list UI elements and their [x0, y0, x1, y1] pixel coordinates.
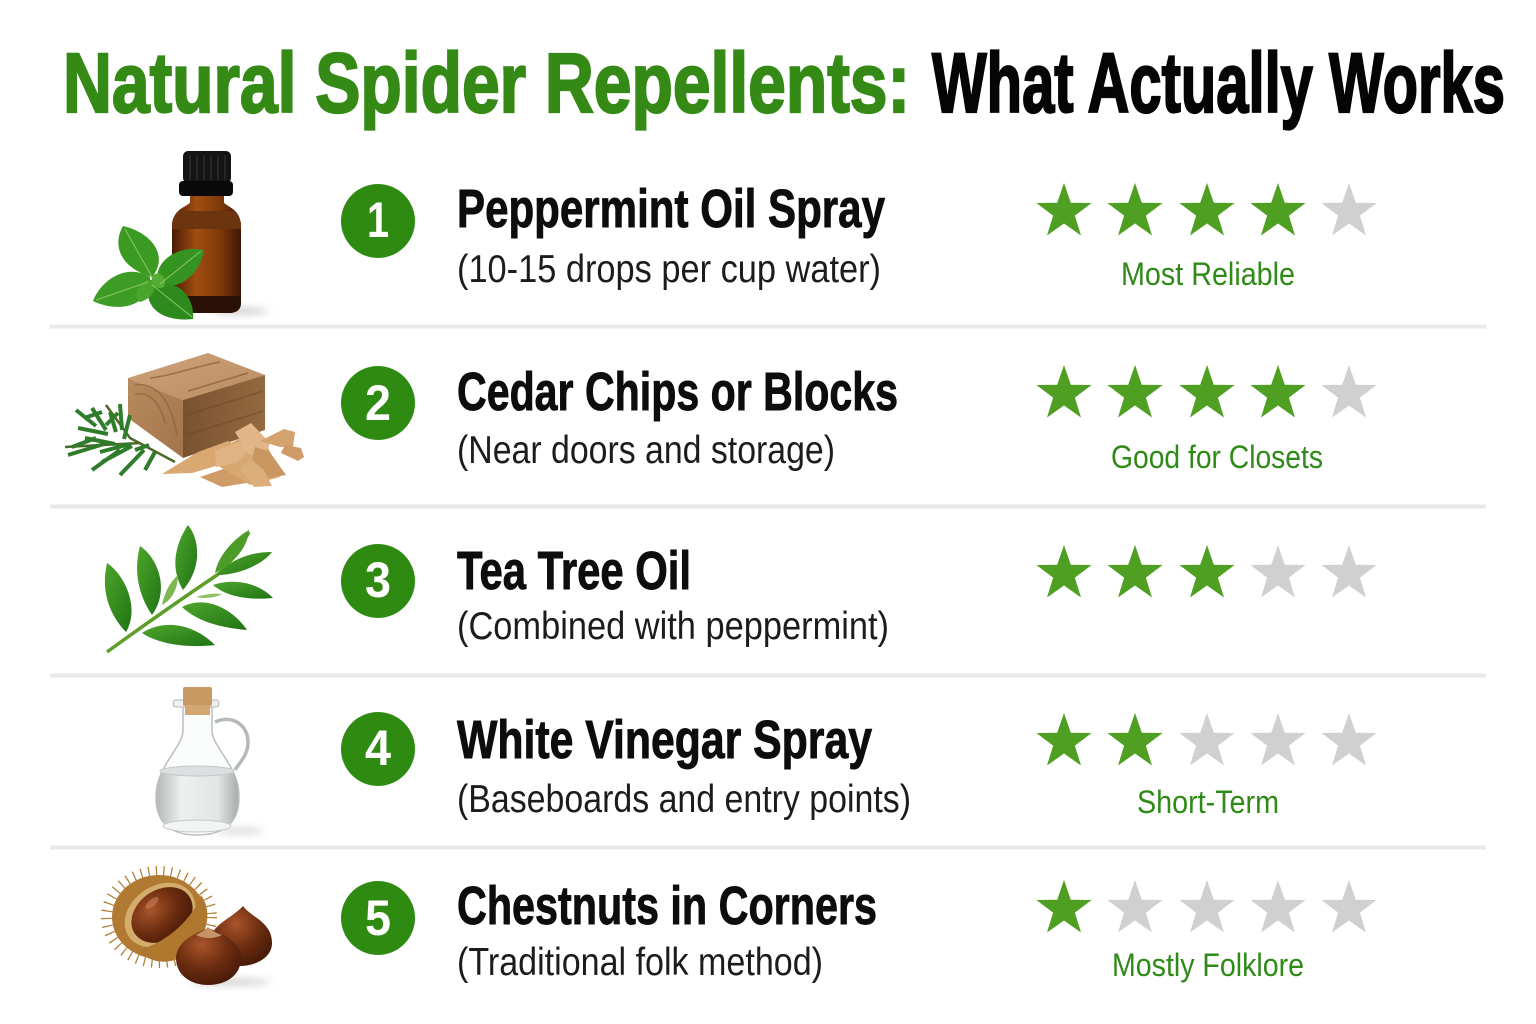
usage note: (Near doors and storage) — [457, 429, 835, 472]
heading: White Vinegar Spray — [457, 710, 872, 770]
heading: Peppermint Oil Spray — [457, 179, 885, 239]
usage note: (Baseboards and entry points) — [457, 778, 911, 821]
number badge 3 — [341, 544, 415, 618]
row 2: cedar chips or blocks — [65, 353, 1377, 487]
number badge 4 — [341, 712, 415, 786]
number badge 5 — [341, 881, 415, 955]
star rating: 2 of 5 — [1036, 713, 1377, 766]
rating label: Mostly Folklore — [1112, 947, 1304, 983]
icon: cedar block, chips and sprig — [65, 353, 304, 487]
heading: Cedar Chips or Blocks — [457, 362, 898, 422]
number badge 1 — [341, 184, 415, 258]
row 5: chestnuts in corners — [109, 869, 1377, 985]
icon: amber bottle with mint — [93, 151, 268, 319]
dosage note: (10-15 drops per cup water) — [457, 248, 881, 291]
icon: chestnuts and spiky husk — [109, 869, 272, 985]
row 1: peppermint oil spray — [93, 151, 1377, 319]
number badge 1: 1 — [367, 192, 389, 248]
icon: glass vinegar cruet — [156, 687, 264, 835]
star rating: 4 of 5 — [1036, 365, 1377, 418]
number badge 5: 5 — [365, 890, 391, 946]
row 3: tea tree oil — [105, 525, 1377, 652]
usage note: (Traditional folk method) — [457, 941, 823, 984]
number badge 3: 3 — [365, 552, 391, 608]
number badge 2 — [341, 366, 415, 440]
number badge 2: 2 — [365, 375, 391, 431]
heading: Chestnuts in Corners — [457, 876, 877, 936]
star rating: 1 of 5 — [1036, 880, 1377, 932]
title: Natural Spider Repellents: — [63, 36, 910, 130]
rating label: Good for Closets — [1111, 439, 1323, 475]
number badge 4: 4 — [365, 720, 391, 776]
star rating: 4 of 5 — [1036, 183, 1377, 236]
rating label: Most Reliable — [1121, 256, 1295, 292]
row 4: white vinegar spray — [156, 687, 1377, 835]
heading: Tea Tree Oil — [457, 541, 691, 601]
icon: tea tree sprig — [105, 525, 273, 652]
star rating: 3 of 5 — [1036, 545, 1377, 598]
usage note: (Combined with peppermint) — [457, 605, 889, 648]
rating label: Short-Term — [1137, 784, 1279, 820]
